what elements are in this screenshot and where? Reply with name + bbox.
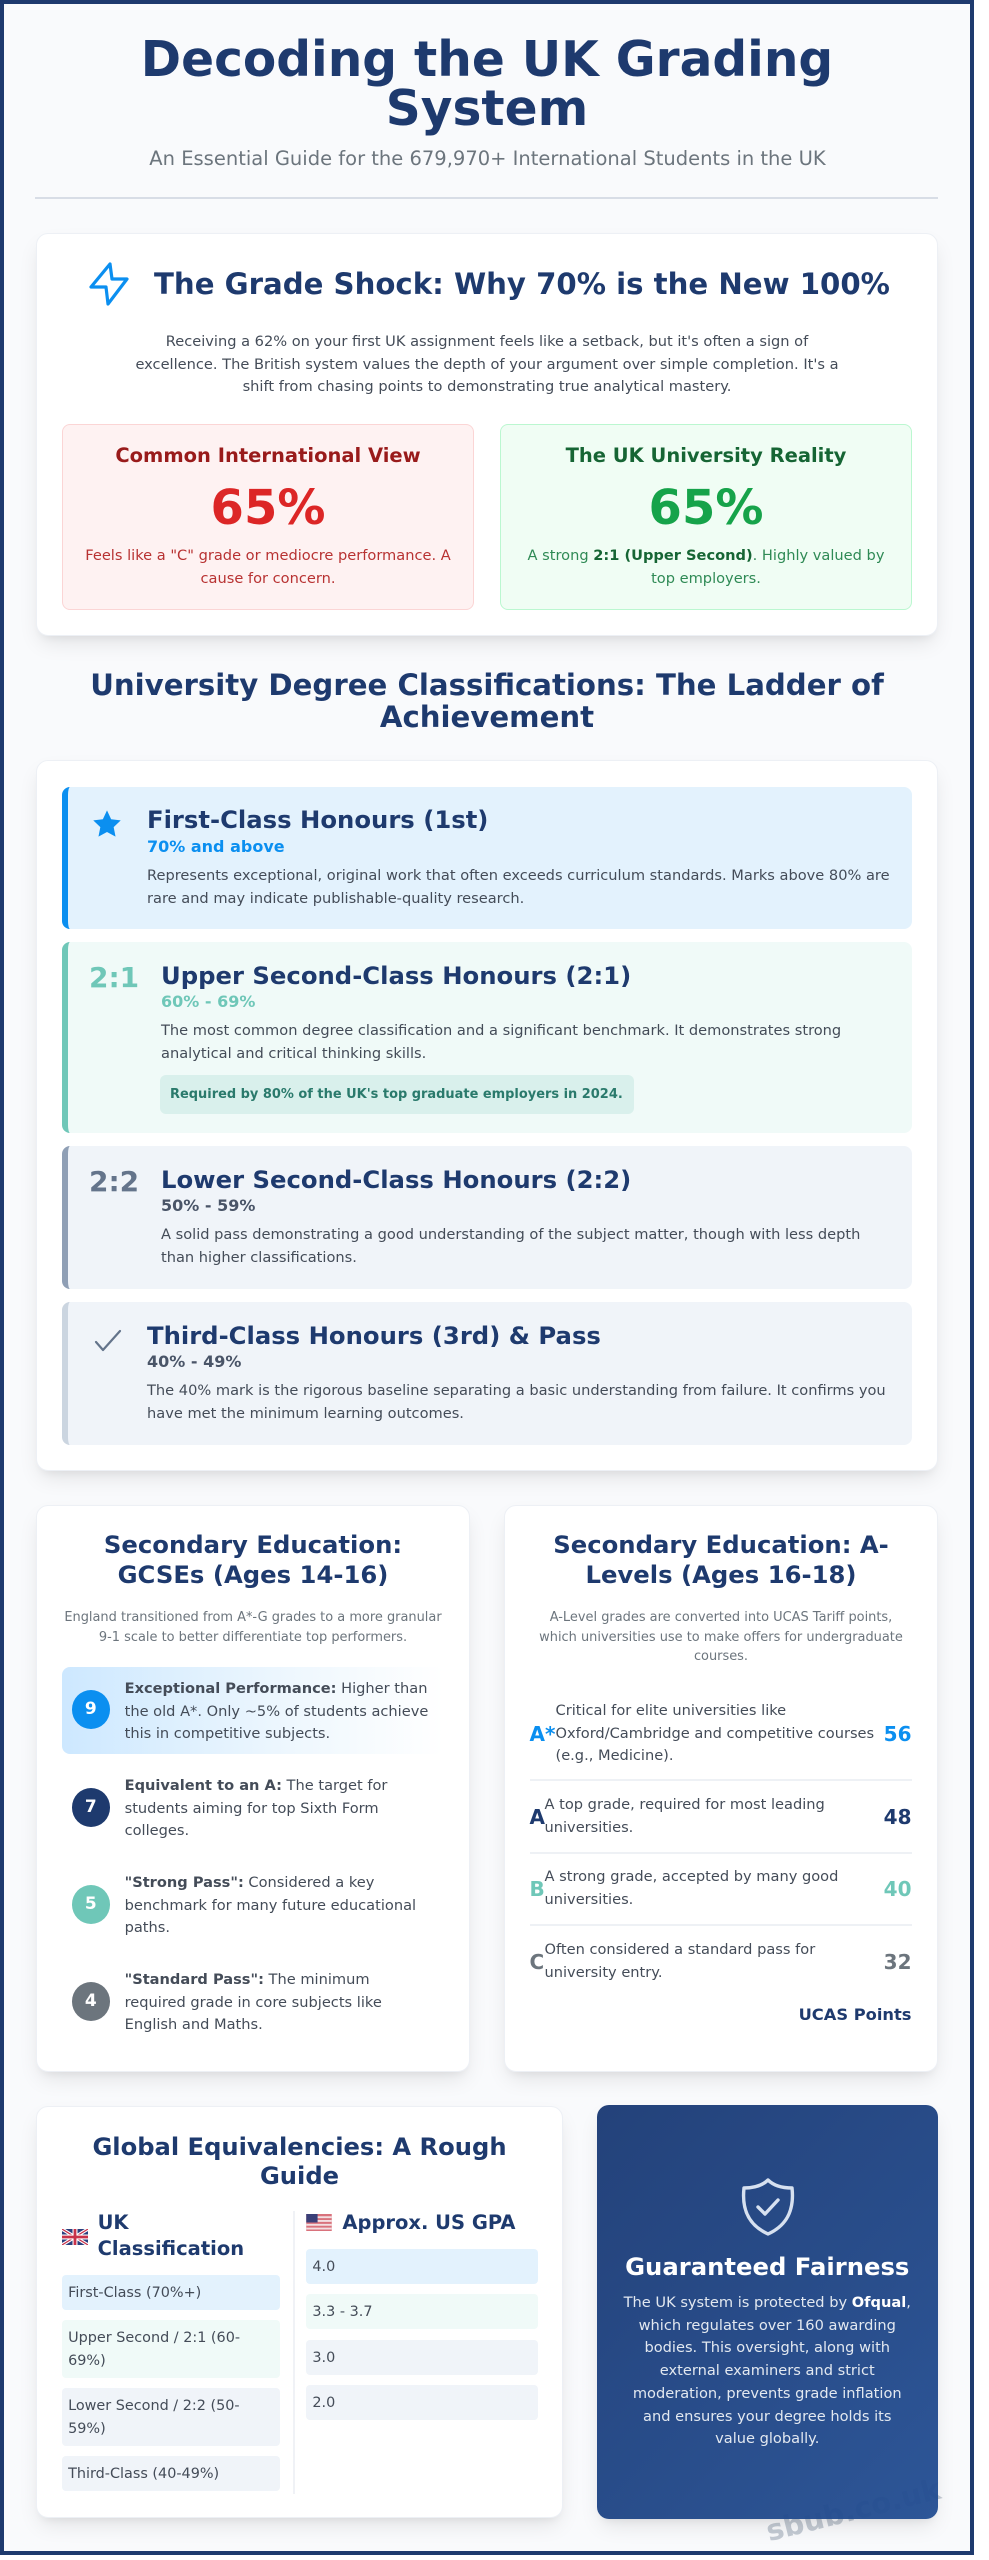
fairness text: moderation, prevents grade inflation [633, 2385, 902, 2402]
grade text: 5: "Strong Pass": Considered a key [125, 1874, 374, 1891]
description: A top grade, required for most leading [544, 1796, 825, 1813]
heading: GCSEs: Secondary Education: [104, 1530, 402, 1559]
title [141, 32, 833, 137]
description [146, 1382, 886, 1422]
column: US [306, 2211, 538, 2420]
panel: guaranteed fairness [596, 2105, 938, 2519]
row label: Third-Class (40-49%) [68, 2466, 219, 2482]
points: 32 [884, 1950, 912, 1974]
row: B [530, 1868, 912, 1908]
callout heading: The UK University Reality [566, 444, 846, 467]
row label: 2.0 [312, 2395, 335, 2411]
title: System [386, 81, 588, 137]
heading: fairness: Guaranteed Fairness [625, 2252, 909, 2281]
description: The 40% mark is the rigorous baseline separating a basic understanding from failure. It confirms you [147, 1382, 886, 1399]
grade badge: 2:1 [89, 961, 139, 994]
column heading: Approx. US GPA [342, 2211, 515, 2234]
row label: 3.0 [312, 2350, 335, 2366]
icon: check mark [94, 1330, 122, 1352]
grade badge: 4: 4 [85, 1991, 97, 2011]
row label: 59%) [68, 2421, 106, 2437]
range: 50% - 59% [161, 1196, 255, 1215]
callout text: cause for concern. [200, 570, 335, 587]
row divider [530, 1779, 912, 1781]
panel: grade shock [36, 233, 938, 636]
icon: US flag [306, 2214, 332, 2231]
callout text [85, 547, 451, 587]
icon: star [93, 810, 121, 836]
rung: first class [62, 787, 912, 929]
callout: international view [62, 424, 474, 610]
heading: equivalencies [92, 2133, 507, 2190]
A-Level tariff table [530, 1702, 912, 2024]
big number: 65% [211, 480, 325, 536]
range: 40% - 49% [147, 1352, 241, 1371]
grade text: 5: paths. [125, 1919, 170, 1936]
column heading [98, 2211, 244, 2260]
row: C [530, 1941, 912, 1981]
rung: third class [62, 1302, 912, 1445]
callout text: Feels like a "C" grade or mediocre performance. A [85, 547, 451, 564]
row: A [530, 1796, 912, 1836]
column heading: UK [98, 2211, 129, 2234]
description: (e.g., Medicine). [556, 1747, 674, 1764]
grade badge: 7: 7 [85, 1797, 97, 1817]
grade text: 9: the old A*. Only ~5% of students achieve [125, 1703, 428, 1720]
heading: GCSEs [104, 1530, 402, 1589]
grade text: 4 [125, 1971, 382, 2033]
description [147, 867, 890, 907]
fairness text [596, 2292, 938, 2451]
row: 3.3-3.7 [306, 2294, 538, 2329]
grade text: 4: "Standard Pass": The minimum [125, 1971, 370, 1988]
grade badge: 9 [72, 1690, 110, 1729]
row: upper second [62, 2320, 280, 2378]
range: 60% - 69% [161, 992, 255, 1011]
row label [68, 2398, 240, 2437]
panel: GCSEs [36, 1505, 470, 2072]
grade: B [530, 1877, 545, 1901]
panel content: degree ladder [62, 787, 912, 1445]
row: 4.0 [306, 2249, 538, 2284]
row: third [62, 2456, 280, 2491]
description: rare and may indicate publishable-quality research. [147, 890, 524, 907]
grade text: 7: Equivalent to an A: The target for [125, 1777, 387, 1794]
row label: Upper Second / 2:1 (60- [68, 2330, 240, 2346]
row label: Lower Second / 2:2 (50- [68, 2398, 240, 2414]
callout text: A strong 2:1 (Upper Second). Highly valued by [528, 547, 884, 564]
description: Critical for elite universities like [556, 1702, 786, 1719]
fairness text: which regulates over 160 awarding [639, 2317, 896, 2334]
fairness text: value globally. [715, 2430, 819, 2447]
grade text: 9: this in competitive subjects. [125, 1725, 330, 1742]
points: 40 [884, 1877, 912, 1901]
grade badge: 2:2 [89, 1165, 139, 1198]
heading: degree classifications: Achievement [380, 700, 594, 734]
row: 2.0 [306, 2385, 538, 2420]
description: The most common degree classification and a significant benchmark. It demonstrates strong [161, 1022, 841, 1039]
grade text: 5: benchmark for many future educational [125, 1897, 416, 1914]
description [160, 1022, 841, 1062]
row: 3.0 [306, 2340, 538, 2375]
GCSE intro [64, 1610, 442, 1645]
heading: degree classifications [90, 668, 884, 734]
title: Lower Second-Class Honours (2:2) [161, 1165, 631, 1194]
GCSE grade list [62, 1667, 428, 2033]
description: analytical and critical thinking skills. [161, 1045, 426, 1062]
panel: degree classifications [36, 760, 938, 1471]
heading: grade shock: The Grade Shock: Why 70% is the New 100% [154, 267, 890, 301]
pill text: Required by 80% of the UK's top graduate employers in 2024. [170, 1087, 623, 1102]
description: have met the minimum learning outcomes. [147, 1405, 464, 1422]
grade badge: 4 [72, 1982, 110, 2021]
row: lower second [62, 2388, 280, 2446]
heading: equivalencies: Guide [260, 2162, 339, 2190]
callout text: top employers. [651, 570, 761, 587]
A-Level intro: A-Level grades are converted into UCAS Tariff points, [550, 1610, 892, 1625]
A-Level intro: courses. [694, 1649, 748, 1664]
description: than higher classifications. [161, 1249, 357, 1266]
description [544, 1796, 825, 1836]
fairness text: and ensures your degree holds its [643, 2408, 891, 2425]
grade: C [530, 1950, 544, 1974]
description [544, 1941, 816, 1981]
icon: lightning bolt [89, 262, 129, 306]
grade badge: 5: 5 [85, 1894, 97, 1914]
grade text: 7 [125, 1777, 388, 1839]
column divider [293, 2211, 295, 2494]
header [35, 32, 938, 199]
description: university entry. [544, 1964, 662, 1981]
icon: shield [736, 2178, 800, 2236]
description: universities. [544, 1891, 633, 1908]
A-Level intro [539, 1610, 903, 1664]
title: Upper Second-Class Honours (2:1) [161, 961, 631, 990]
rung: lower second [62, 1146, 912, 1289]
grade text: 9 [125, 1680, 428, 1742]
callout heading: Common International View [115, 444, 421, 467]
grade text: 7: students aiming for top Sixth Form [125, 1800, 379, 1817]
heading: A-Levels: Levels (Ages 16-18) [585, 1560, 857, 1589]
heading: A-Levels: Secondary Education: A- [553, 1530, 889, 1559]
rung: upper second [62, 942, 912, 1133]
watermark: sbub.co.uk [763, 2472, 944, 2548]
intro paragraph: excellence. The British system values the depth of your argument over simple completion. It's a [135, 356, 839, 373]
title: Decoding the UK Grading [141, 32, 833, 88]
row label: 69%) [68, 2353, 106, 2369]
column: UK [62, 2211, 280, 2491]
grade badge: 9: 9 [85, 1699, 97, 1719]
column caption: UCAS Points [799, 2005, 912, 2024]
intro paragraph: Receiving a 62% on your first UK assignment feels like a setback, but it's often a sign of [166, 333, 808, 350]
description: Oxford/Cambridge and competitive courses [556, 1725, 874, 1742]
description [161, 1226, 860, 1266]
heading: equivalencies: Global Equivalencies: A Rough [92, 2133, 507, 2161]
points: 56 [884, 1722, 912, 1746]
heading: degree classifications: University Degree Classifications: The Ladder of [90, 668, 884, 702]
description: Often considered a standard pass for [544, 1941, 815, 1958]
panel: A-Levels [504, 1505, 938, 2072]
big number: 65% [649, 480, 763, 536]
row divider [530, 1852, 912, 1854]
heading: A-Levels [553, 1530, 889, 1589]
range: 70% and above [147, 837, 285, 856]
callout: UK reality [500, 424, 912, 610]
panel: global equivalencies [36, 2106, 563, 2518]
A-Level intro: which universities use to make offers for undergraduate [539, 1630, 903, 1645]
fairness text: bodies. This oversight, along with [644, 2339, 890, 2356]
title: First-Class Honours (1st) [147, 805, 488, 834]
icon: UK flag [62, 2229, 88, 2245]
grade badge: 5 [72, 1885, 110, 1924]
header rule [35, 197, 938, 199]
panel content: grade shock [62, 262, 912, 610]
row: first [62, 2275, 280, 2310]
grade text: 7: colleges. [125, 1822, 189, 1839]
intro paragraph: shift from chasing points to demonstrating true analytical mastery. [243, 378, 731, 395]
grade: A* [530, 1722, 555, 1746]
stat pill [160, 1075, 634, 1114]
description: A strong grade, accepted by many good [544, 1868, 838, 1885]
row label: First-Class (70%+) [68, 2285, 201, 2301]
grade text: 4: English and Maths. [125, 2016, 263, 2033]
row divider [530, 1924, 912, 1926]
title: Third-Class Honours (3rd) & Pass [147, 1321, 601, 1350]
fairness text: The UK system is protected by Ofqual, [624, 2294, 911, 2311]
points: 48 [884, 1805, 912, 1829]
description: A solid pass demonstrating a good understanding of the subject matter, though with less depth [161, 1226, 860, 1243]
row: A star [530, 1702, 912, 1764]
grade text: 5 [125, 1874, 416, 1936]
GCSE intro: 9-1 scale to better differentiate top performers. [99, 1630, 407, 1645]
callout text [528, 547, 884, 587]
grade text: 4: required grade in core subjects like [125, 1994, 382, 2011]
grade row: 9 [62, 1667, 444, 1754]
row label: 4.0 [312, 2259, 335, 2275]
subtitle: An Essential Guide for the 679,970+ International Students in the UK [149, 147, 826, 170]
grade text: 9: Exceptional Performance: Higher than [125, 1680, 427, 1697]
grade badge: 7 [72, 1788, 110, 1827]
intro paragraph [135, 333, 839, 395]
description [544, 1868, 838, 1908]
fairness text: external examiners and strict [660, 2362, 875, 2379]
description [556, 1702, 874, 1764]
heading: GCSEs: GCSEs (Ages 14-16) [118, 1560, 388, 1589]
column heading: Classification [98, 2237, 244, 2260]
row label [68, 2330, 240, 2369]
row label: 3.3 - 3.7 [312, 2304, 373, 2320]
grade: A [530, 1805, 545, 1829]
description: Represents exceptional, original work that often exceeds curriculum standards. Marks above 80% are [147, 867, 890, 884]
GCSE intro: England transitioned from A*-G grades to a more granular [64, 1610, 442, 1625]
description: universities. [544, 1819, 633, 1836]
